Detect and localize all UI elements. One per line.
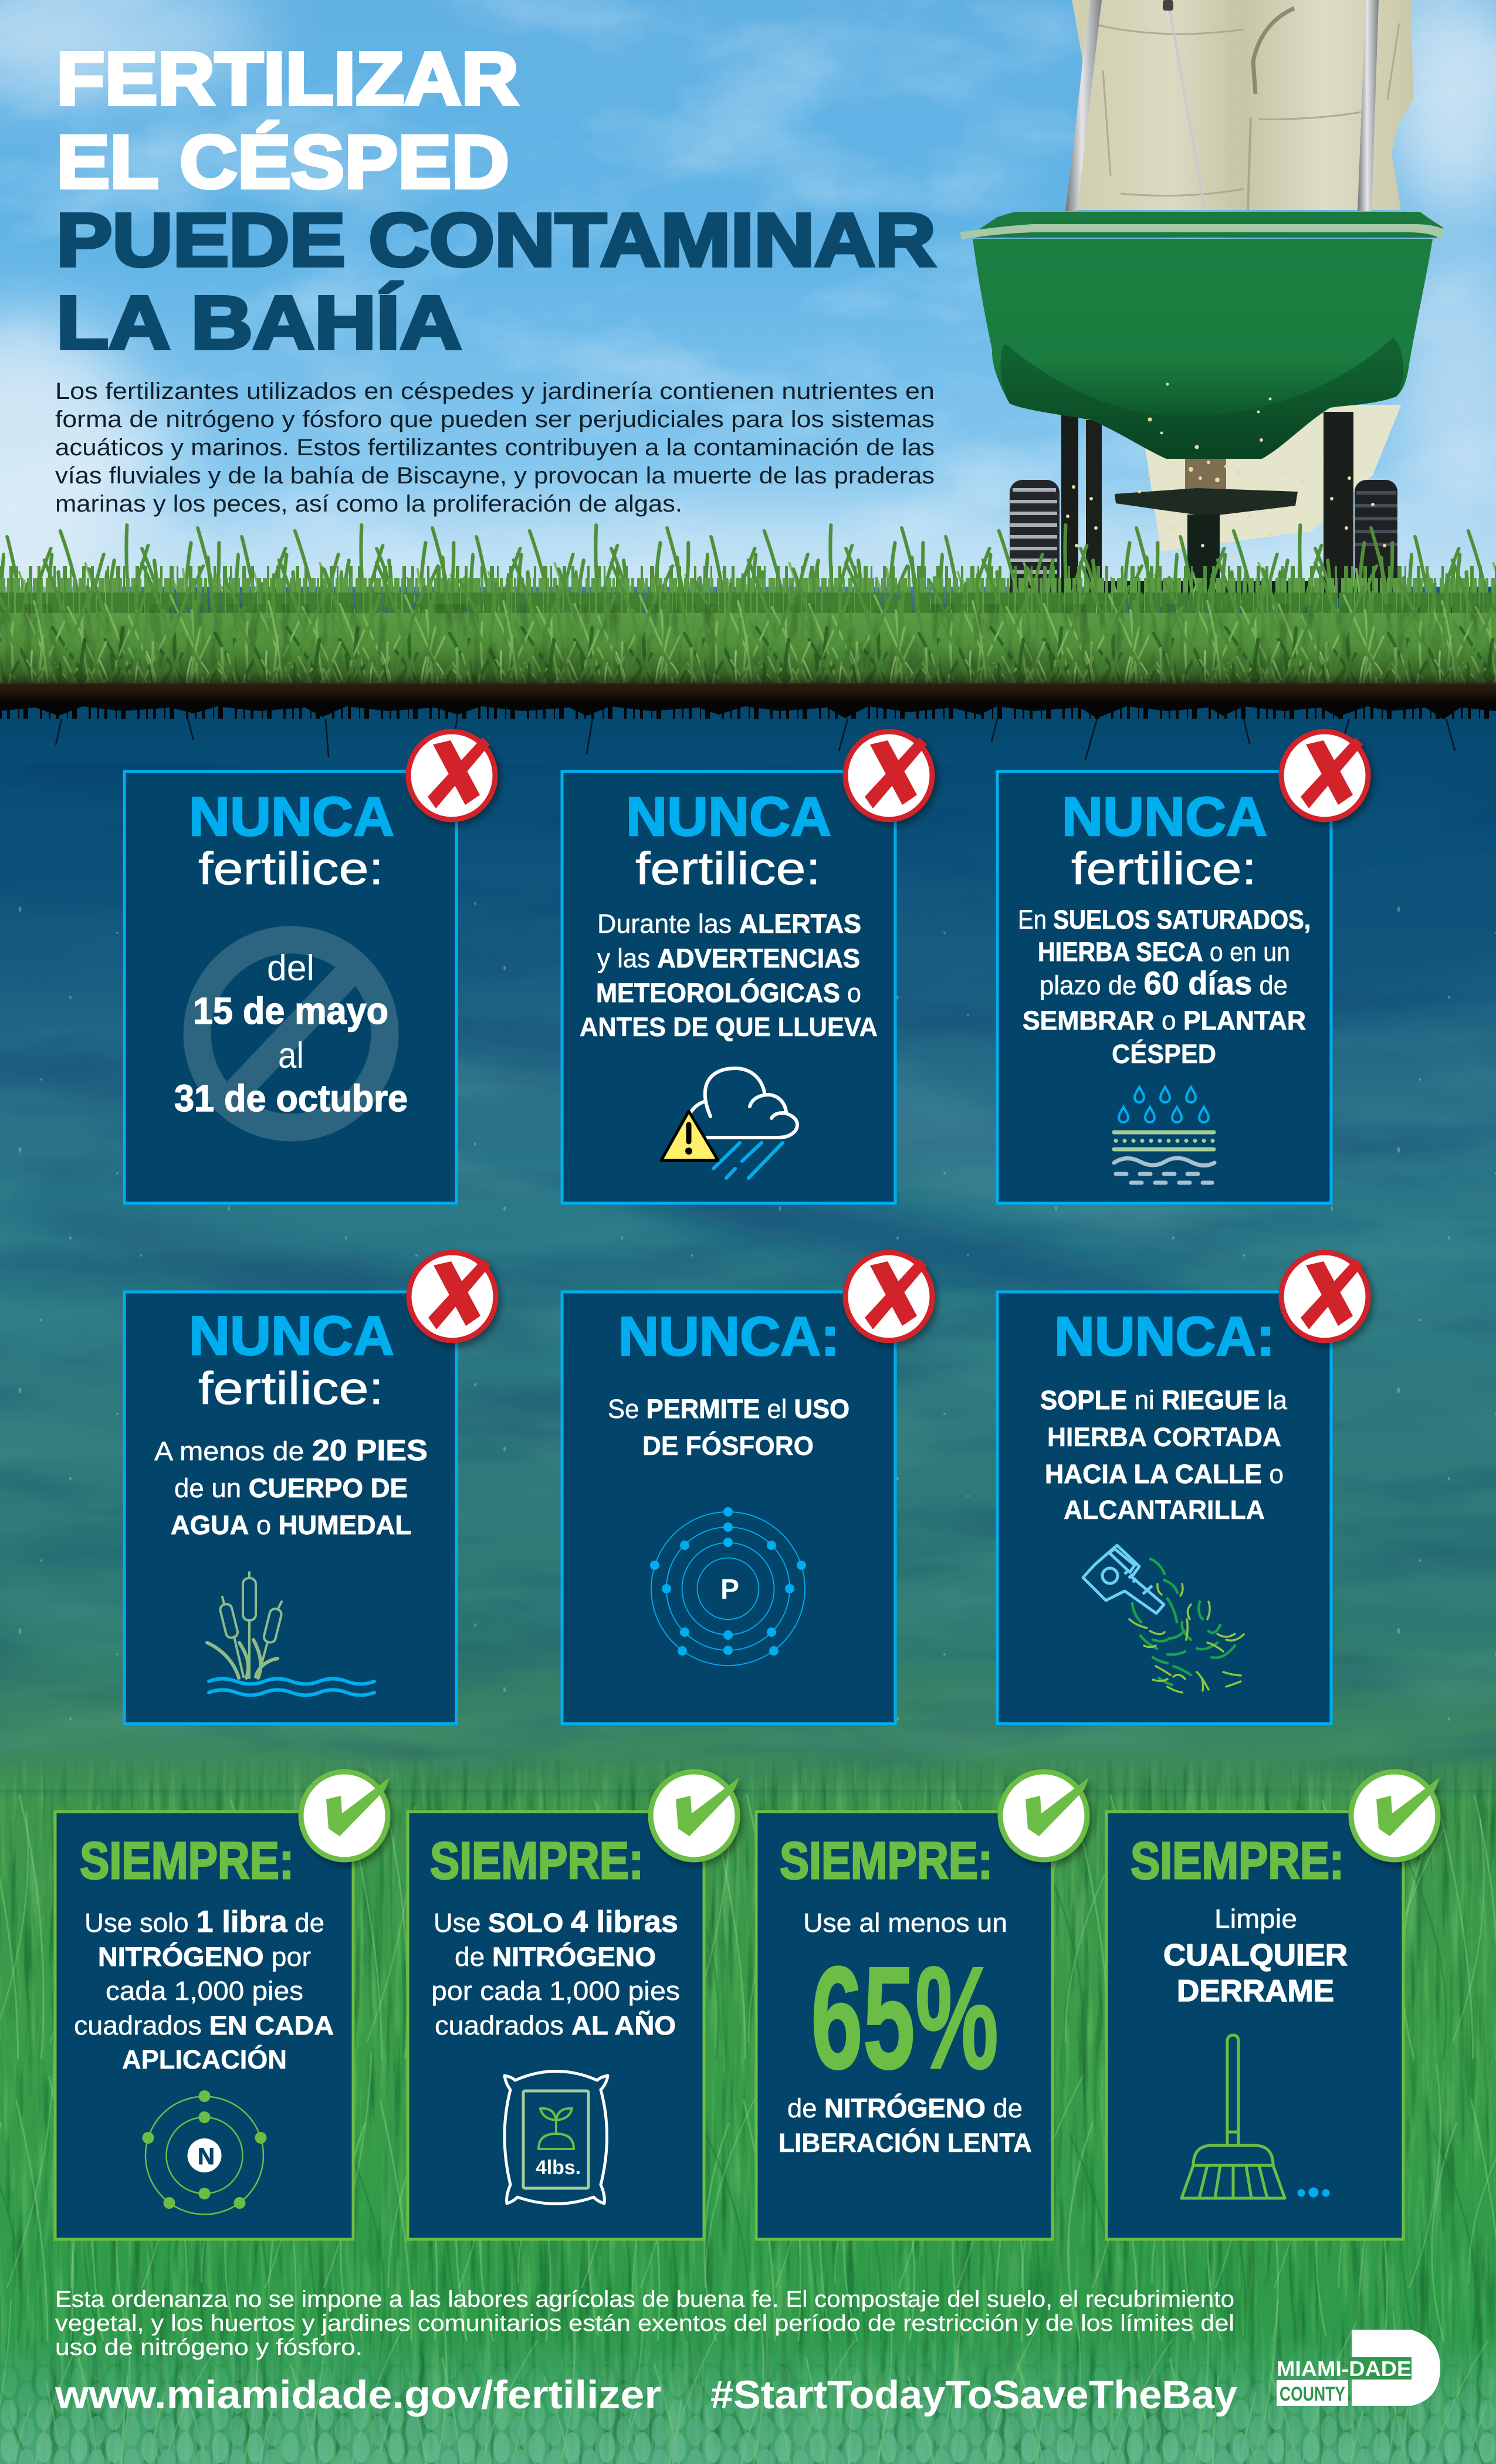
body text: ANTES DE QUE LLUEVA bbox=[580, 1012, 878, 1042]
body text: Use solo 1 libra de bbox=[84, 1905, 324, 1939]
icon: broom bbox=[1182, 2035, 1329, 2198]
panel: siempre 4 libras bbox=[408, 1772, 739, 2239]
footer note: Esta ordenanza no se impone a las labores agrícolas de buena fe. El compostaje del suelo, el recubrimiento bbox=[55, 2287, 1234, 2312]
panel: nunca cuerpo de agua bbox=[124, 1253, 496, 1724]
body text: ALCANTARILLA bbox=[1064, 1495, 1265, 1525]
body text: Se PERMITE el USO bbox=[608, 1394, 849, 1424]
body text: DERRAME bbox=[1177, 1974, 1334, 2008]
body text bbox=[154, 1434, 428, 1540]
panel: siempre 1 libra bbox=[55, 1772, 390, 2239]
body text bbox=[431, 1905, 680, 2040]
icon: phosphorus atom: P bbox=[720, 1574, 739, 1605]
intro text block: vías fluviales y de la bahía de Biscayne, y provocan la muerte de las praderas bbox=[55, 463, 935, 489]
footer note: vegetal, y los huertos y jardines comunitarios están exentos del período de restricción y de los límites del bbox=[55, 2311, 1234, 2336]
intro text block: forma de nitrógeno y fósforo que pueden ser perjudiciales para los sistemas bbox=[55, 407, 935, 432]
heading: nunca: NUNCA bbox=[189, 1305, 394, 1366]
icon: saturated soil bbox=[1114, 1087, 1214, 1183]
heading: siempre: SIEMPRE: bbox=[1131, 1831, 1344, 1890]
photo: fertilizer spreader bbox=[960, 0, 1443, 605]
heading: EL CÉSPED bbox=[56, 120, 509, 204]
dates text: 31 de octubre bbox=[174, 1077, 408, 1119]
big number: 65%: 65% bbox=[811, 1936, 999, 2099]
icon: storm cloud with warning bbox=[661, 1068, 797, 1178]
dates text: 15 de mayo bbox=[193, 990, 388, 1032]
icon: grass clippings bbox=[1129, 1559, 1244, 1693]
body text: SEMBRAR o PLANTAR bbox=[1023, 1006, 1306, 1035]
intro text block: marinas y los peces, así como la proliferación de algas. bbox=[55, 491, 682, 517]
body text: de un CUERPO DE bbox=[174, 1473, 408, 1503]
body text: Use SOLO 4 libras bbox=[434, 1905, 678, 1939]
body text: METEOROLÓGICAS o bbox=[596, 978, 861, 1008]
panel: nunca fechas bbox=[124, 732, 495, 1203]
background: underwater and lawn bbox=[0, 698, 1496, 2464]
body text bottom: LIBERACIÓN LENTA bbox=[779, 2128, 1032, 2158]
body text: HACIA LA CALLE o bbox=[1045, 1459, 1284, 1489]
body text bbox=[608, 1394, 849, 1461]
body text: de NITRÓGENO bbox=[455, 1942, 656, 1972]
body text: por cada 1,000 pies bbox=[431, 1976, 680, 2006]
icon: prohibition sign bbox=[197, 940, 385, 1128]
panel: siempre 65 por ciento bbox=[756, 1772, 1089, 2239]
footer note bbox=[55, 2287, 1234, 2360]
icon: nitrogen atom bbox=[142, 2090, 266, 2214]
badge: green check bbox=[651, 1772, 739, 1860]
badge: red X bbox=[408, 732, 495, 820]
heading: FERTILIZAR bbox=[56, 37, 519, 121]
body text: SOPLE ni RIEGUE la bbox=[1040, 1385, 1288, 1415]
badge: red X bbox=[845, 732, 932, 820]
body text: plazo de 60 días de bbox=[1040, 964, 1288, 1001]
heading: nunca: NUNCA bbox=[1062, 786, 1267, 847]
background: sky bbox=[0, 0, 1496, 622]
handles and wire bbox=[1065, 0, 1379, 211]
dates text: del bbox=[267, 948, 314, 989]
body text bbox=[74, 1905, 334, 2074]
badge: green check bbox=[1000, 1772, 1089, 1860]
footer note: uso de nitrógeno y fósforo. bbox=[55, 2335, 363, 2360]
subheading: fertilice: fertilice: bbox=[1071, 842, 1257, 894]
body text: AGUA o HUMEDAL bbox=[171, 1510, 411, 1540]
logo: Miami-Dade County bbox=[1277, 2330, 1440, 2406]
body text: CÉSPED bbox=[1112, 1039, 1216, 1069]
panel: nunca suelos saturados bbox=[997, 732, 1368, 1203]
legs wheels and spinner bbox=[1010, 412, 1397, 605]
body text: Limpie bbox=[1214, 1904, 1297, 1934]
badge: red X bbox=[409, 1253, 496, 1341]
hashtag: #StartTodayToSaveTheBay bbox=[710, 2372, 1237, 2417]
fertilizer pellets falling bbox=[1066, 383, 1386, 559]
body text: HIERBA CORTADA bbox=[1047, 1422, 1281, 1452]
heading: siempre: SIEMPRE: bbox=[780, 1831, 993, 1890]
dates text bbox=[174, 948, 408, 1119]
intro text block: Los fertilizantes utilizados en céspedes y jardinería contienen nutrientes en bbox=[55, 378, 935, 404]
badge: green check bbox=[301, 1772, 390, 1860]
website url: www.miamidade.gov/fertilizer bbox=[55, 2372, 661, 2417]
body text: En SUELOS SATURADOS, bbox=[1018, 905, 1311, 935]
subheading: fertilice: fertilice: bbox=[198, 1362, 384, 1414]
logo: Miami-Dade County: MIAMI-DADE bbox=[1277, 2357, 1412, 2381]
badge: red X bbox=[1281, 732, 1368, 820]
icon: leaf blower bbox=[1083, 1545, 1164, 1613]
intro text block bbox=[55, 378, 935, 517]
heading: nunca: NUNCA bbox=[189, 786, 394, 847]
body text: cada 1,000 pies bbox=[106, 1976, 303, 2006]
body text: cuadrados EN CADA bbox=[74, 2011, 334, 2040]
body text: CUALQUIER bbox=[1163, 1938, 1348, 1972]
heading: siempre: SIEMPRE: bbox=[430, 1831, 644, 1890]
body text bottom: de NITRÓGENO de bbox=[787, 2093, 1023, 2123]
panel: siempre limpie bbox=[1106, 1772, 1440, 2239]
body text: A menos de 20 PIES bbox=[154, 1434, 428, 1467]
badge: red X bbox=[845, 1253, 932, 1341]
icon: fertilizer bag: 4lbs. bbox=[536, 2157, 581, 2179]
body text bbox=[1040, 1385, 1288, 1525]
heading: nunca: NUNCA: bbox=[1054, 1305, 1275, 1367]
subheading: fertilice: fertilice: bbox=[635, 842, 821, 894]
panel: nunca alertas bbox=[562, 732, 932, 1203]
body text: y las ADVERTENCIAS bbox=[597, 943, 860, 973]
dates text: al bbox=[278, 1035, 304, 1076]
badge: red X bbox=[1281, 1253, 1368, 1341]
panel: nunca hierba cortada bbox=[997, 1253, 1368, 1724]
logo: Miami-Dade County: COUNTY bbox=[1280, 2383, 1345, 2405]
heading: LA BAHÍA bbox=[56, 281, 462, 365]
heading bbox=[56, 37, 936, 365]
body text: Durante las ALERTAS bbox=[597, 909, 861, 939]
heading: PUEDE CONTAMINAR bbox=[56, 198, 936, 282]
icon: nitrogen atom: N bbox=[198, 2144, 215, 2169]
icon: fertilizer bag bbox=[505, 2071, 608, 2204]
heading: siempre: SIEMPRE: bbox=[80, 1831, 294, 1890]
body text top: Use al menos un bbox=[803, 1908, 1007, 1938]
subheading: fertilice: fertilice: bbox=[198, 842, 384, 894]
body text: HIERBA SECA o en un bbox=[1038, 937, 1290, 967]
body text bbox=[1018, 905, 1311, 1069]
soil strip with roots bbox=[0, 683, 1496, 760]
body text: NITRÓGENO por bbox=[98, 1942, 311, 1972]
pants bbox=[1068, 0, 1413, 551]
panel: nunca fosforo bbox=[562, 1253, 932, 1724]
background: lawn above soil bbox=[0, 519, 1496, 698]
body text bottom bbox=[779, 2093, 1032, 2158]
heading: nunca: NUNCA: bbox=[618, 1305, 840, 1367]
body text bbox=[580, 909, 878, 1042]
heading: nunca: NUNCA bbox=[626, 786, 831, 847]
icon: phosphorus atom bbox=[650, 1507, 806, 1666]
body text: cuadrados AL AÑO bbox=[435, 2011, 676, 2040]
body text: APLICACIÓN bbox=[122, 2045, 287, 2074]
hopper bbox=[960, 212, 1443, 459]
body text bbox=[1163, 1904, 1348, 2008]
body text: DE FÓSFORO bbox=[642, 1431, 814, 1461]
intro text block: acuáticos y marinos. Estos fertilizantes contribuyen a la contaminación de las bbox=[55, 435, 935, 461]
badge: green check bbox=[1351, 1772, 1440, 1860]
icon: cattails and water bbox=[207, 1572, 374, 1695]
